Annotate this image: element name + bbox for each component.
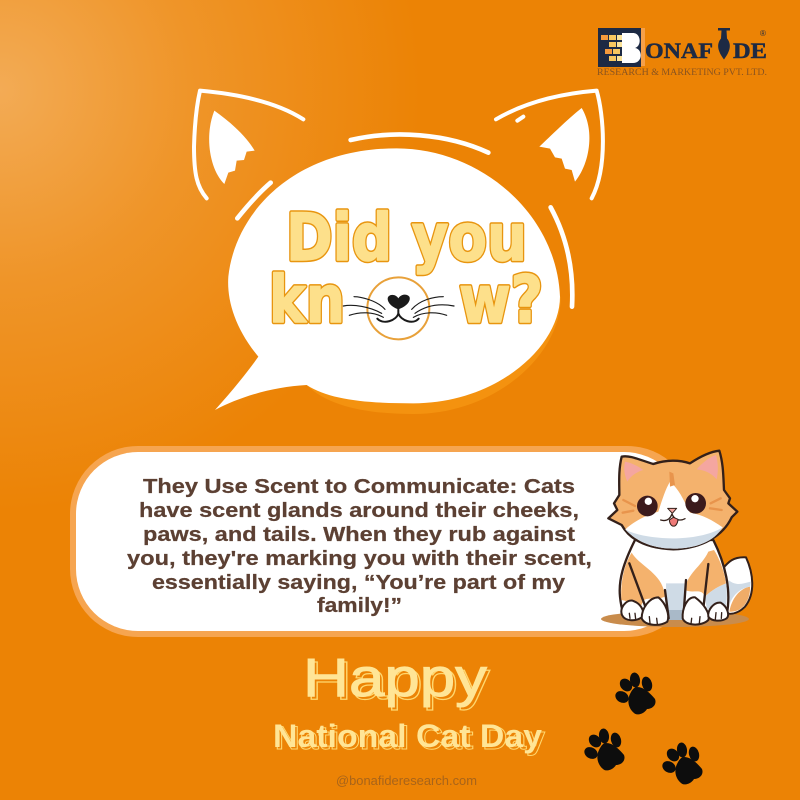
fact text: [127, 475, 592, 617]
heading fill layer: Did you: [286, 201, 527, 276]
cat mouth: [377, 309, 419, 322]
logo mark: [598, 28, 645, 67]
right ear small dash: [517, 117, 523, 121]
website handle: @bonafideresearch.com: [336, 774, 477, 788]
left ear outline: [194, 91, 303, 198]
right ear outline: [496, 91, 603, 198]
heading outline layer: Did you: [286, 201, 527, 276]
icon: paw print 1: [613, 672, 656, 714]
chest shade: [666, 583, 685, 620]
eyes: [637, 496, 658, 516]
fact text: paws, and tails. When they rub against: [143, 523, 575, 546]
logo pen nib: [718, 28, 730, 60]
chin shade: [625, 527, 723, 549]
panel body: [76, 452, 686, 631]
heading outline layer: [269, 201, 543, 338]
bubble: [215, 148, 560, 410]
head: [608, 451, 737, 549]
icon: paw print 3: [660, 742, 703, 784]
left arc: [237, 183, 271, 218]
body orange patches: [621, 553, 665, 608]
front legs: [629, 563, 708, 618]
logo tagline: RESEARCH & MARKETING PVT. LTD.: [597, 68, 767, 78]
cat-shaped speech bubble: [194, 91, 603, 414]
title: Happy: Happy: [303, 648, 487, 708]
heading fill layer: kn: [269, 263, 345, 338]
whiskers: [343, 297, 454, 317]
front paws: [621, 597, 728, 625]
top arc: [351, 135, 488, 153]
fact text: They Use Scent to Communicate: Cats: [143, 475, 575, 498]
heading: Did you know?: [269, 201, 543, 338]
cheek stripes: [623, 498, 722, 513]
mouth: [661, 514, 685, 521]
fact text: you, they're marking you with their scent,: [127, 547, 592, 570]
logo wordmark end: DE: [733, 38, 767, 63]
logo: Bonafide Research & Marketing: [597, 28, 767, 78]
head forehead mark: [669, 472, 675, 487]
heading outline layer: w?: [459, 263, 543, 338]
heading outline layer: kn: [269, 263, 345, 338]
logo registered mark: ®: [760, 29, 766, 38]
panel border: [70, 446, 695, 637]
ground shadow: [601, 611, 749, 627]
icon: paw print 2: [582, 728, 625, 770]
body: [620, 540, 728, 615]
icon: cat nose letter o: [343, 277, 454, 339]
title: Happy: Happy: [306, 651, 490, 711]
nose: [668, 508, 677, 513]
right arc: [551, 207, 572, 307]
heading fill layer: [269, 201, 543, 338]
left inner ear: [209, 111, 255, 184]
right inner ear: [539, 108, 589, 182]
ears inner: [624, 462, 643, 482]
heading fill layer: w?: [459, 263, 543, 338]
subtitle: National Cat Day: National Cat Day: [275, 720, 545, 756]
panel: fact: [70, 446, 695, 637]
subtitle: National Cat Day: National Cat Day: [273, 718, 542, 754]
tail: [722, 557, 752, 614]
fact text: essentially saying, “You’re part of my: [152, 571, 566, 594]
fact text: have scent glands around their cheeks,: [139, 499, 579, 522]
white face blaze and chin: [625, 482, 723, 549]
bubble shadow: [307, 297, 561, 414]
fact text: family!”: [317, 594, 402, 617]
illustration: sitting kitten: [601, 451, 752, 627]
cat nose: [388, 295, 410, 309]
logo wordmark start: ONAF: [645, 38, 713, 63]
